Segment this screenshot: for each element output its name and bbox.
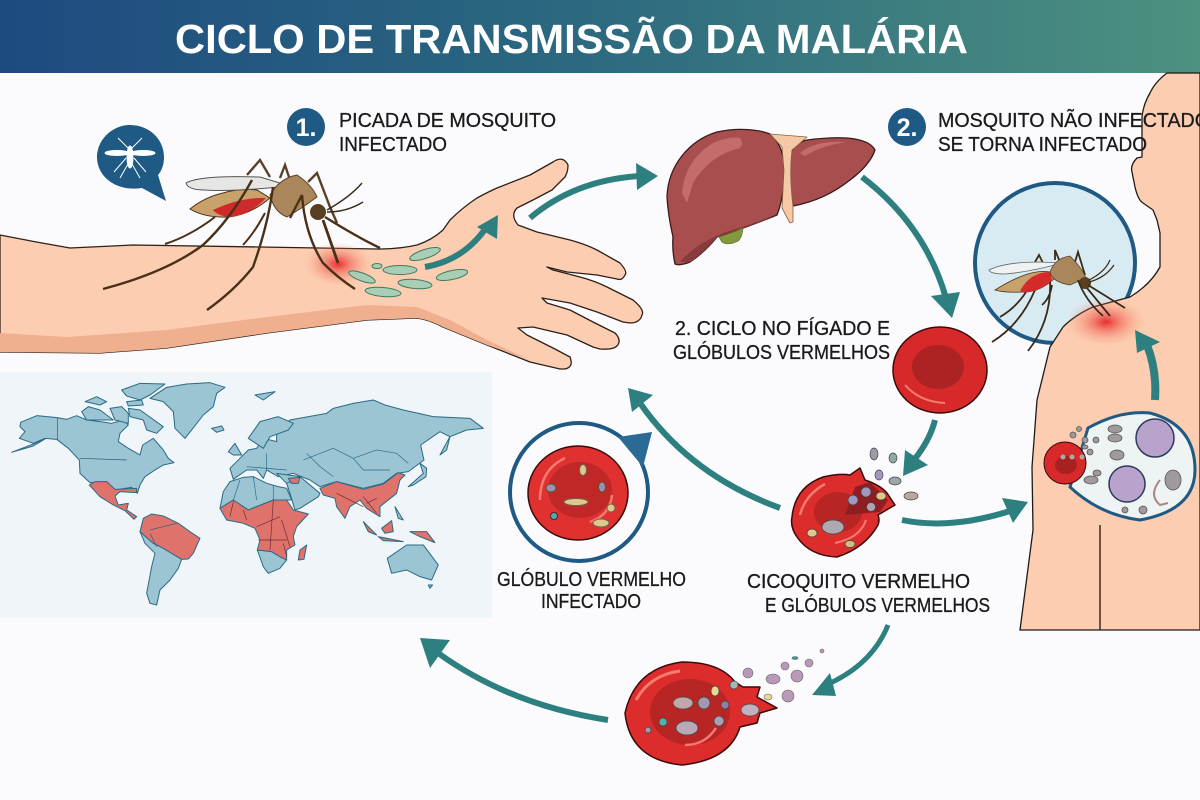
text: cell stage: E GLÓBULOS VERMELHOS bbox=[765, 594, 990, 617]
liver bbox=[667, 129, 875, 265]
text: infected red cell: INFECTADO bbox=[541, 591, 641, 613]
world map bbox=[0, 372, 492, 618]
bite mark on shoulder bbox=[1066, 298, 1146, 346]
step 1 label: INFECTADO bbox=[339, 134, 447, 156]
arrow: cell to burst cell bbox=[903, 420, 935, 476]
text: cell stage bbox=[747, 571, 990, 617]
arm and hand bbox=[0, 159, 643, 369]
mosquito icon bubble bbox=[97, 125, 166, 201]
arrow: burst cell to shoulder bbox=[902, 498, 1028, 523]
arrow: burst cell back up bbox=[628, 388, 780, 508]
step 2 badge: 2. bbox=[897, 114, 917, 142]
step 2 text: SE TORNA INFECTADO bbox=[938, 134, 1147, 156]
arrow: lower cell to map bbox=[420, 638, 608, 720]
step 1 label bbox=[287, 108, 556, 156]
step 1 label: 1. bbox=[296, 114, 316, 142]
infected red blood cell callout bbox=[510, 423, 652, 561]
arrow: down to lower cell bbox=[812, 625, 888, 696]
lower bursting cell bbox=[625, 649, 824, 765]
text: liver cycle: GLÓBULOS VERMELHOS bbox=[673, 341, 890, 364]
text: infected red cell bbox=[497, 568, 686, 613]
blood smear callout bbox=[1044, 413, 1195, 520]
parasites in arm bbox=[347, 245, 469, 298]
step 2 badge bbox=[888, 108, 926, 146]
text: infected red cell: GLÓBULO VERMELHO bbox=[497, 568, 686, 591]
arrow: liver to cell bbox=[862, 177, 960, 318]
red land bbox=[89, 473, 435, 560]
mosquito in circle bbox=[989, 250, 1125, 351]
arrow: arm vein bbox=[425, 215, 498, 267]
step 1 label: PICADA DE MOSQUITO bbox=[339, 110, 556, 132]
zoom circle bbox=[975, 183, 1135, 343]
step 2 text bbox=[938, 108, 1200, 156]
arrow: hand to liver bbox=[530, 163, 658, 218]
text: cell stage: CICOQUITO VERMELHO bbox=[747, 571, 970, 593]
text: liver cycle: 2. CICLO NO FÍGADO E bbox=[675, 317, 890, 340]
body with shoulder bbox=[1020, 73, 1200, 630]
header banner bbox=[0, 0, 1200, 73]
bursting cell bbox=[792, 448, 918, 557]
mosquito on arm bbox=[103, 160, 380, 310]
title: CICLO DE TRANSMISSÃO DA MALÁRIA bbox=[175, 16, 968, 62]
arrow: up to bite bbox=[1135, 330, 1160, 400]
bite mark on arm bbox=[304, 242, 372, 286]
text: liver cycle bbox=[673, 317, 890, 364]
borders bbox=[57, 418, 408, 557]
blue land bbox=[12, 383, 483, 605]
red blood cell bbox=[893, 327, 987, 413]
